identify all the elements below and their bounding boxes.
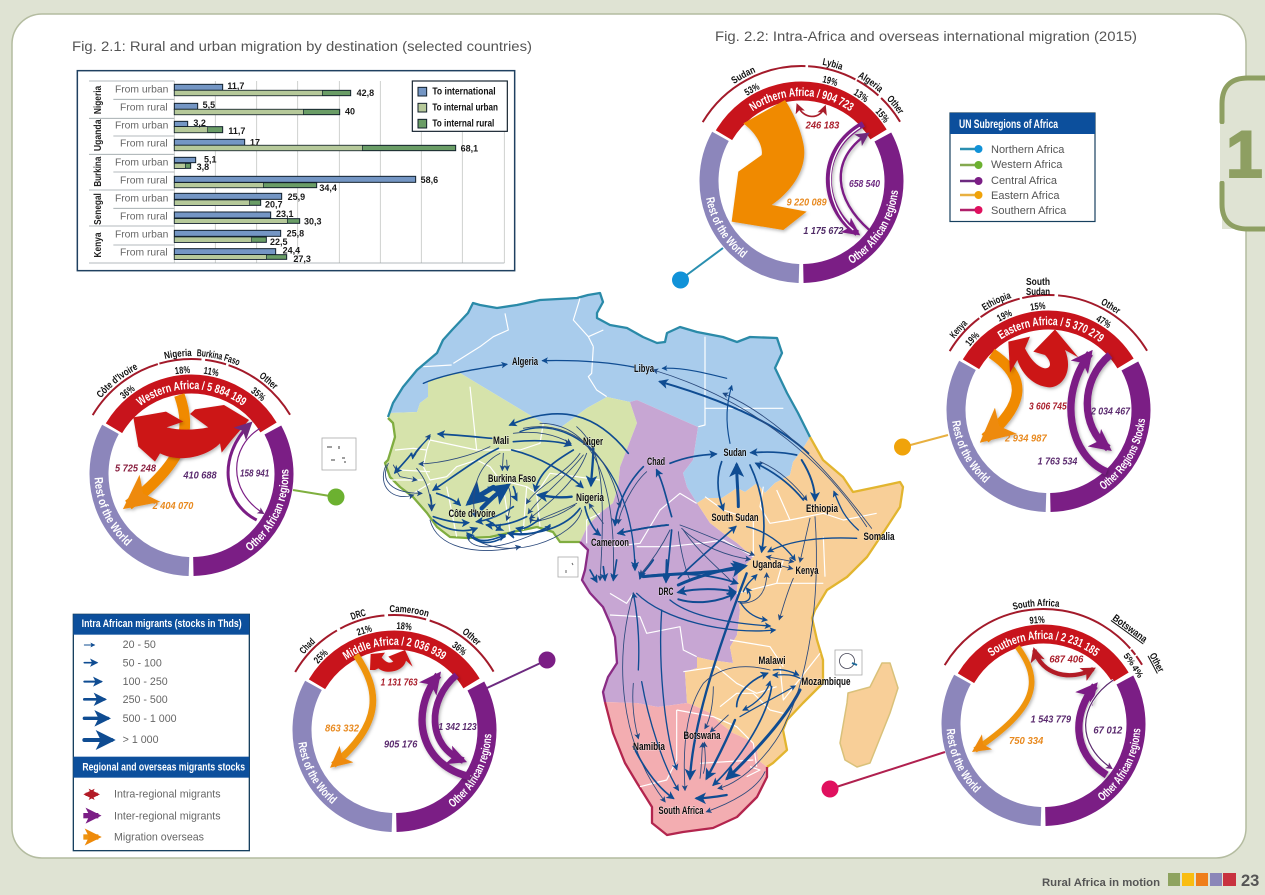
map: country labels: Mali [493,435,509,447]
values: 658 540 [849,179,880,190]
label: South Sudan: Sudan [1026,287,1050,298]
donut: Southern Africa: South Africa [1012,598,1060,613]
donut: Northern Africa: Other [888,96,904,114]
map: country labels: Uganda [752,559,782,571]
country labels: Uganda [93,119,104,151]
values: 410 688 [182,470,217,481]
bar chart: migration by destination [77,71,515,271]
donut: Northern Africa: Sudan [731,68,756,84]
donut: Northern Africa: Algeria [858,72,882,93]
values: 2 034 467 [1090,406,1130,417]
legend: UN subregions: UN Subregions of Africa [959,117,1058,131]
country labels [93,85,104,257]
row labels [115,85,169,259]
leader line and dot: Southern Africa [822,752,945,798]
donut: Southern Africa: Rest of the World [944,728,984,795]
donut: Northern Africa: Rest of the World [706,197,748,258]
value labels: 30,3 [304,216,321,226]
inset: Sao Tome [558,557,578,577]
footer [1042,872,1259,890]
map: country borders west and north [390,298,607,543]
map arrows: north-east [618,368,872,580]
map: country labels: Nigeria [576,492,605,504]
map: country labels: Burkina Faso [488,473,536,485]
donut: Eastern Africa [946,277,1150,512]
map: country labels: Mozambique [802,676,850,688]
values: 2 934 987 [1004,434,1047,445]
legend heading: regional and overseas [73,757,249,778]
values: 687 406 [1049,655,1084,666]
donut: Western Africa: Côte d'Ivoire [97,364,138,397]
map: country labels: Côte d'Ivoire [448,508,496,520]
donut: Western Africa: 36% [120,385,135,398]
map: country labels [448,356,895,817]
map region: Northern Africa [388,293,810,503]
page number: 23 [1241,872,1259,890]
donut: Western Africa: 11% [204,367,218,376]
map: country labels: Malawi [758,655,786,667]
values: 1 175 672 [803,226,844,237]
chart legend: To internal rural [432,119,494,130]
legend stock ranges: 100 - 250 [123,676,168,688]
values: 67 012 [1093,725,1123,736]
row labels: From rural [120,248,168,259]
arrows: inter-regional migrants [228,424,263,520]
donut: Northern Africa: Lybia [822,58,842,70]
donut: Northern Africa: 15% [875,108,890,123]
chapter number: 1 [1226,117,1263,191]
donut: Western Africa: Rest of the World [94,478,132,546]
country labels: Senegal [93,193,104,225]
row labels: From urban [115,121,169,132]
values: 1 543 779 [1031,714,1071,725]
label: South Sudan: South [1026,277,1050,288]
legend: migrant stocks: Regional and overseas migrants stocks [82,762,245,774]
donut: Northern Africa: 19% [822,76,838,86]
footer: Rural Africa in motion [1042,877,1160,889]
arrow: overseas migration [975,647,1032,750]
donut: Western Africa: 18% [175,366,190,374]
legend: UN subregions: Southern Africa [991,205,1067,217]
label: South Sudan [1026,277,1050,298]
arrow: intra-regional migrants [370,650,413,672]
map: country labels: Sudan [724,447,747,459]
legend labels [114,789,221,844]
values: 5 725 248 [115,464,156,475]
map region: Southern Africa [605,702,767,835]
legend heading: intra African migrants [73,614,249,635]
map arrows: west and north [383,361,672,580]
arrow: intra-regional migrants [1034,650,1093,675]
values [1009,655,1123,747]
donut: Western Africa [90,348,294,576]
arrow: overseas migration [333,655,373,765]
donut: Northern Africa: 13% [853,89,868,102]
donut: Middle Africa: 25% [314,649,328,664]
donut: Northern Africa: 53% [744,83,760,96]
value labels: 34,4 [319,183,337,193]
value labels: 5,1 [204,154,216,164]
legend: UN subregions: Western Africa [991,159,1063,171]
legend: migrant stocks [73,614,249,851]
legend stock ranges [123,639,177,746]
donut: Western Africa: 35% [251,387,266,401]
map: country labels: South Sudan [712,512,759,524]
value labels: 25,9 [288,192,305,202]
values: 750 334 [1009,736,1044,747]
donut: Middle Africa: Other [463,628,481,645]
donut: Eastern Africa: 47% [1096,316,1111,328]
donut: Middle Africa: Other African regions [448,734,492,806]
values [787,120,880,237]
label: Botswana: Botswana [1110,613,1149,645]
arrows: inter-regional migrants [422,675,470,777]
donut: Eastern Africa: 19% [966,332,980,346]
donut: Western Africa: Nigeria [164,348,192,360]
value labels: 24,4 [283,246,300,256]
map: country labels: Chad [647,456,665,468]
country labels: Kenya [93,232,104,257]
row labels: From rural [120,212,168,223]
value labels: 3,8 [197,162,209,172]
value labels: 11,7 [228,126,245,136]
country labels: Nigeria [93,85,104,114]
map: country labels: Somalia [864,531,895,543]
map: country labels: Niger [583,436,604,448]
donut: Western Africa: Burkina Faso [197,349,240,366]
value labels: 17 [250,137,260,147]
donut: Eastern Africa: Rest of the World [952,420,990,484]
inset: Cape Verde [322,438,356,470]
donut: Middle Africa: Cameroon [390,605,429,617]
values: 158 941 [240,469,270,480]
donut: Middle Africa: 21% [355,624,373,639]
donut: Middle Africa: Middle Africa / 2 036 939 [342,636,446,660]
donut: Eastern Africa: Other Regions Stocks [1100,418,1145,489]
donut: Southern Africa: Southern Africa / 2 231 185 [985,628,1102,659]
value labels [193,81,478,264]
chart legend: To internal urban [432,103,498,114]
map: country labels: Algeria [512,356,539,368]
values: 1 342 123 [438,722,477,733]
donut: Southern Africa [942,598,1166,826]
values: 9 220 089 [787,198,827,209]
map: coastlines [385,293,903,835]
map: country labels: DRC [658,586,674,598]
value labels: 3,2 [193,118,206,128]
row labels: From rural [120,139,168,150]
values: 1 763 534 [1038,456,1078,467]
value labels: 27,3 [293,254,311,264]
row labels: From rural [120,176,168,187]
value labels: 22,5 [270,237,287,247]
legend: UN subregions: Central Africa [991,175,1058,187]
value labels: 23,1 [276,209,293,219]
row labels: From urban [115,85,169,96]
donut: Middle Africa: Rest of the World [298,742,338,804]
donut: Eastern Africa: Eastern Africa / 5 370 279 [997,316,1104,342]
donut: Eastern Africa: 15% [1030,302,1046,310]
map: country labels: Kenya [796,565,819,577]
map: country borders north-east and centre [613,337,877,577]
donut: Eastern Africa: 19% [996,310,1012,322]
arrow: overseas migration [732,100,807,230]
label: Other: Other [1147,651,1166,674]
row labels: From urban [115,230,169,241]
leader line and dot: Middle Africa [487,652,556,688]
donut: Eastern Africa: Kenya [949,321,968,338]
chart legend: To international [432,87,496,98]
map region: Middle Africa [580,400,753,707]
values: 246 183 [805,120,840,131]
legend icons [83,794,98,837]
legend stock ranges: 50 - 100 [123,658,162,670]
value labels: 40 [345,107,355,117]
map arrows: south [590,560,816,812]
values: 905 176 [384,739,418,750]
title: figure 2.1: Fig. 2.1: Rural and urban migration by destination (selected countries) [72,39,532,54]
values: 2 404 070 [152,501,194,512]
map: country borders south [610,560,823,787]
arrow: intra-regional migrants [133,405,249,462]
label: 4%: 4% [1130,663,1145,680]
map: country labels: Libya [634,363,655,375]
value labels: 68,1 [461,143,478,153]
map: Madagascar [840,663,898,767]
legend stock ranges: > 1 000 [123,734,159,746]
arrow: overseas migration [985,353,1017,438]
value labels: 25,8 [287,228,304,238]
row labels: From urban [115,158,169,169]
map: country labels: Cameroon [591,537,629,549]
donut: Eastern Africa: Other [1102,298,1120,314]
donut: Western Africa: Western Africa / 5 884 189 [136,380,246,406]
leader line and dot: Western Africa [293,488,344,506]
donut: Southern Africa: Other African regions [1095,728,1143,804]
legend: UN subregions [950,113,1095,222]
donut: Northern Africa: Other African regions [848,190,898,263]
leader line and dot: Northern Africa [672,248,723,288]
values [1004,401,1130,467]
legend labels: Intra-regional migrants [114,789,221,801]
legend stock ranges: 20 - 50 [123,639,156,651]
donut: Middle Africa: Chad [300,637,316,654]
value labels: 5,5 [203,100,215,110]
leader line and dot: Eastern Africa [894,435,948,456]
legend arrows by stock size [84,645,112,740]
legend: UN subregions: Eastern Africa [991,190,1060,202]
arrows: inter-regional migrants [829,124,869,233]
map: country labels: South Africa [658,805,704,817]
values: 1 131 763 [381,678,418,689]
value labels: 11,7 [227,81,244,91]
legend: migrant stocks: Intra African migrants (stocks in Thds) [82,618,242,630]
arrows: inter-regional migrants [1071,353,1110,472]
donut: Middle Africa: DRC [350,609,366,620]
donut: Western Africa: Other [260,372,278,389]
value labels: 42,8 [357,88,374,98]
donut: Southern Africa: 91% [1029,615,1045,627]
arrows: inter-regional migrants [1079,680,1113,775]
row labels: From rural [120,103,168,114]
donut: Middle Africa [292,605,496,832]
values: 3 606 745 [1029,401,1067,412]
label: 5%: 5% [1121,651,1137,667]
value labels: 58,6 [421,175,438,185]
title: figure 2.2: Fig. 2.2: Intra-Africa and overseas international migration (2015) [715,29,1137,44]
donut: Northern Africa [700,58,904,283]
map: country labels: Botswana [684,730,721,742]
map: country labels: Ethiopia [806,503,839,515]
bars [174,84,456,259]
inset: Comoros and Seychelles [835,650,862,675]
value labels: 20,7 [265,200,282,210]
donut: Eastern Africa: Ethiopia [981,292,1012,311]
chapter tab [1220,76,1265,229]
chart legend [412,81,507,131]
row labels: From urban [115,194,169,205]
arrow: intra-regional migrants [1008,329,1078,387]
arrow: intra-regional migrants [797,105,825,116]
values [325,678,477,750]
donut: Northern Africa: Northern Africa / 904 723 [748,87,854,111]
values: 863 332 [325,724,359,735]
map of Africa [322,293,903,835]
country labels: Burkina [93,156,104,187]
map region: Eastern Africa [685,437,903,767]
legend stock ranges: 500 - 1 000 [123,713,177,725]
donut: Middle Africa: 36% [450,640,468,658]
donut: Western Africa: Other African regions [246,469,290,550]
arrow: overseas migration [128,395,185,505]
values [115,464,270,512]
map region: Western Africa [385,373,637,542]
legend stock ranges: 250 - 500 [123,694,168,706]
legend labels: Migration overseas [114,832,204,844]
legend labels: Inter-regional migrants [114,810,221,822]
legend: UN subregions: Northern Africa [991,144,1065,156]
map: country labels: Namibia [633,741,666,753]
donut: Middle Africa: 18% [396,621,412,633]
